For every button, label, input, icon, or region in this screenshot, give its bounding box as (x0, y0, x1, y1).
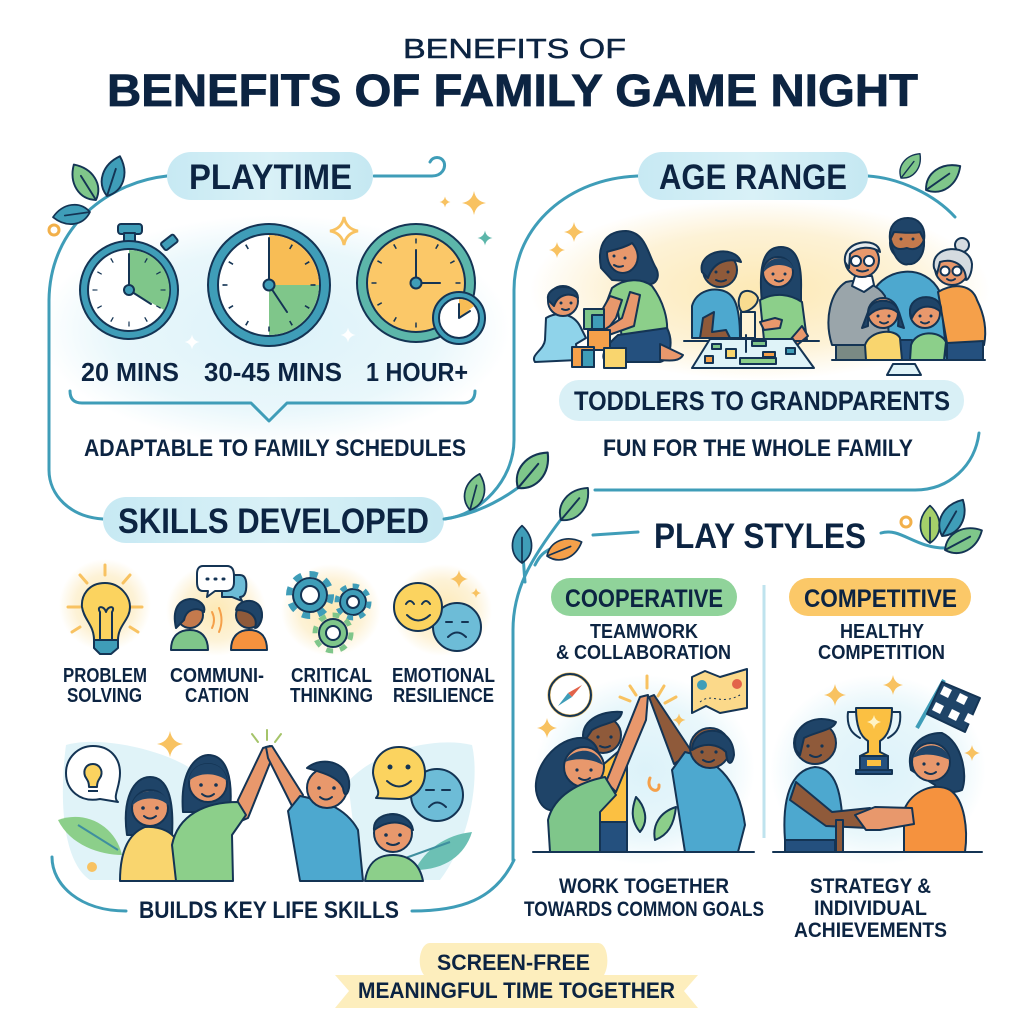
callout: toddlers to grandparents: TODDLERS TO GRANDPARENTS (574, 386, 950, 416)
heading: play styles (593, 517, 945, 556)
label: emotional resilience (392, 665, 495, 707)
label: 1 hour+: 1 HOUR+ (366, 357, 468, 387)
label: problem solving: PROBLEM (63, 665, 147, 687)
text: strategy (794, 875, 947, 942)
illustration: family high five (58, 730, 475, 881)
leaves: vine left (512, 481, 596, 565)
panel: play styles (512, 481, 987, 942)
text: teamwork: TEAMWORK (590, 621, 698, 643)
heading: competitive (789, 578, 971, 616)
title (107, 33, 918, 116)
playtime background glow (40, 215, 510, 445)
skill icon glow row (59, 559, 492, 656)
title: BENEFITS OF (403, 33, 626, 64)
illustration: cooperative team high five (533, 669, 755, 865)
text: healthy competition (818, 621, 945, 664)
text: work together: TOWARDS COMMON GOALS (524, 898, 764, 921)
label: 20 mins: 20 MINS (81, 357, 179, 387)
frame line: age range (445, 176, 979, 519)
sparkles: age range (549, 222, 584, 258)
label: critical thinking: CRITICAL (291, 665, 372, 687)
heading: skills developed: SKILLS DEVELOPED (118, 502, 429, 541)
heading: age range: AGE RANGE (659, 158, 847, 197)
panel: playtime (40, 152, 510, 519)
label: critical thinking (290, 665, 373, 707)
frame line: playtime (49, 158, 444, 519)
text: strategy: STRATEGY & (810, 875, 931, 898)
icon: light bulb (68, 565, 142, 654)
text: teamwork (556, 621, 731, 664)
banner: screen-free: MEANINGFUL TIME TOGETHER (358, 978, 675, 1003)
bracket (70, 391, 475, 421)
heading: cooperative (551, 578, 737, 616)
callout: toddlers to grandparents (559, 380, 964, 421)
label: emotional resilience: EMOTIONAL (392, 665, 495, 687)
banner: screen-free: SCREEN-FREE (437, 950, 590, 975)
heading: play styles: PLAY STYLES (654, 517, 866, 556)
label: emotional resilience: RESILIENCE (393, 685, 494, 707)
illustration: competitive handshake with trophy (770, 675, 986, 865)
frame line: skills bottom (52, 857, 514, 911)
label: critical thinking: THINKING (290, 685, 373, 707)
label: communication (170, 665, 264, 707)
leaves: age range (895, 149, 966, 199)
heading: competitive: COMPETITIVE (804, 585, 957, 613)
heading: playtime (167, 152, 373, 200)
frame line: play styles (513, 518, 562, 860)
leaves: playtime corner (49, 153, 130, 235)
illustration: mother and toddler with blocks (534, 231, 683, 368)
illustration: grandparents, parent and grandchildren (828, 218, 985, 375)
caption: adaptable: ADAPTABLE TO FAMILY SCHEDULES (84, 435, 466, 462)
panel: skills developed (52, 445, 557, 924)
icon: communication (171, 566, 267, 650)
icon: gears (289, 574, 369, 651)
illustration: kids with board game (684, 247, 819, 368)
leaves: centre branch (444, 445, 557, 519)
text: work together (524, 875, 764, 921)
caption: fun for the whole family: FUN FOR THE WHOLE FAMILY (603, 435, 913, 462)
heading: cooperative: COOPERATIVE (565, 585, 723, 613)
sparkles: playtime (184, 191, 492, 350)
divider (762, 585, 766, 838)
text: strategy: INDIVIDUAL (814, 897, 927, 920)
icon: clock 30-45 mins (208, 224, 330, 346)
text: strategy: ACHIEVEMENTS (794, 919, 947, 942)
caption: builds key life skills: BUILDS KEY LIFE SKILLS (139, 897, 399, 924)
title: BENEFITS OF FAMILY GAME NIGHT (107, 65, 918, 116)
label: 30-45 mins: 30-45 MINS (204, 357, 342, 387)
label: problem solving (63, 665, 147, 707)
text: healthy competition: COMPETITION (818, 642, 945, 664)
icon: emotion faces (394, 570, 481, 651)
label: communication: COMMUNI- (170, 665, 264, 687)
heading: playtime: PLAYTIME (189, 158, 352, 197)
icon: stopwatch 20 mins (80, 224, 178, 339)
panel: age range (445, 149, 990, 519)
icon: clock 1 hour (357, 224, 485, 344)
text: healthy competition: HEALTHY (840, 621, 925, 643)
leaves: play styles right (901, 494, 987, 559)
label: communication: CATION (185, 685, 249, 707)
label: problem solving: SOLVING (67, 685, 142, 707)
text: teamwork: & COLLABORATION (556, 642, 731, 664)
text: work together: WORK TOGETHER (559, 875, 729, 898)
banner: screen-free (335, 943, 698, 1008)
age range glow (530, 200, 990, 380)
